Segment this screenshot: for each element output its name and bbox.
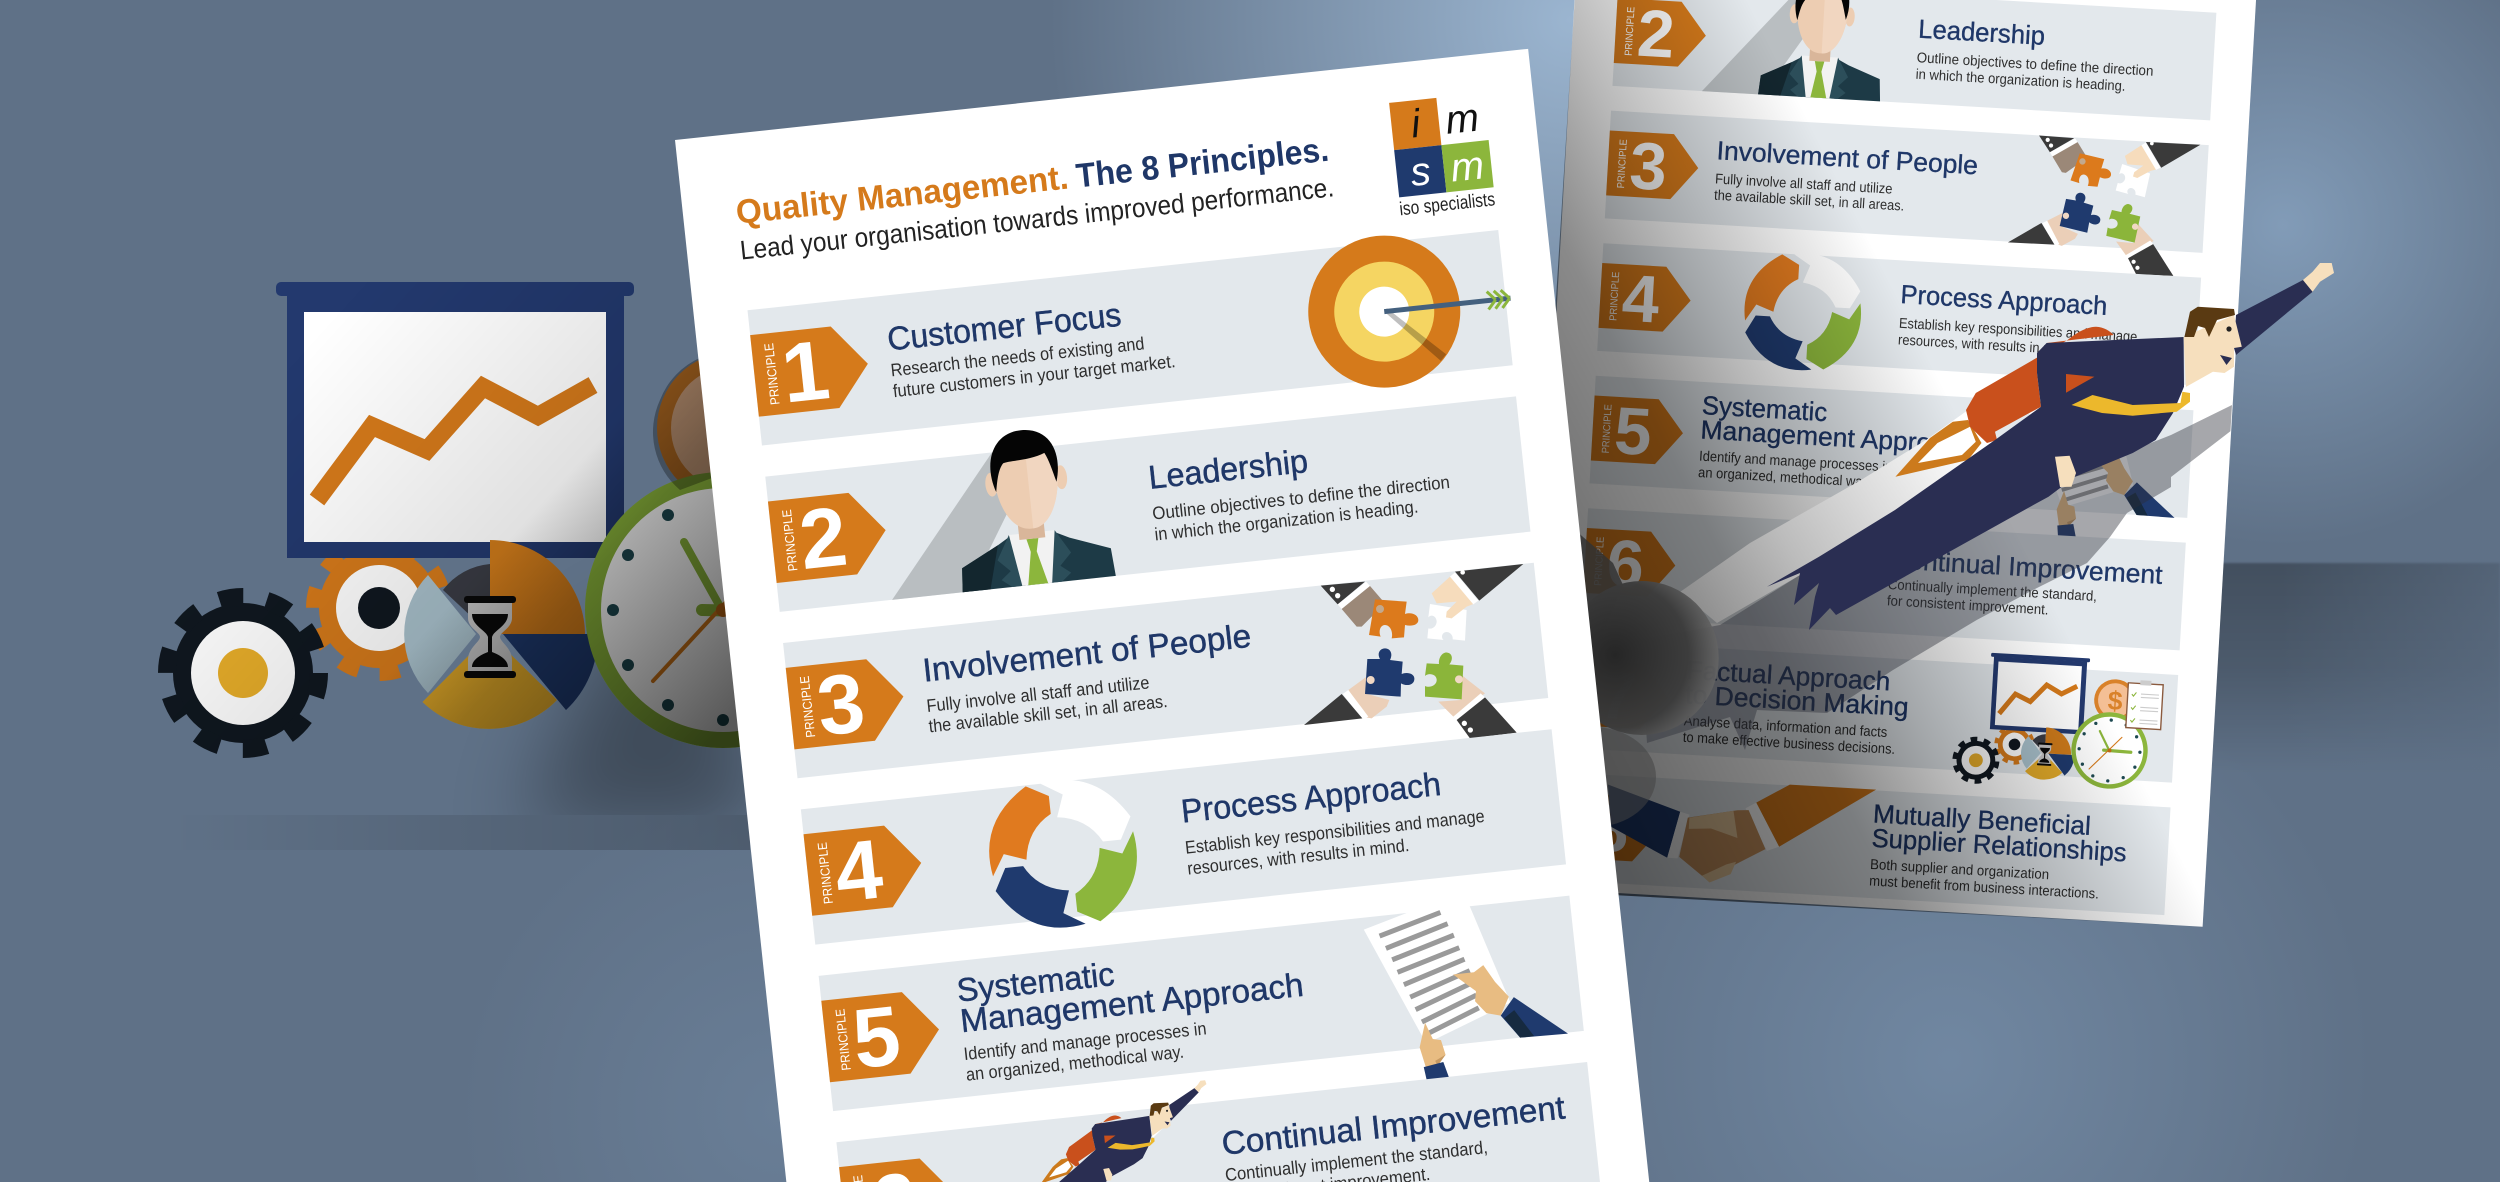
row 5: Systematic Management Approach <box>817 880 1588 1147</box>
principle 1 badge <box>750 318 873 424</box>
principle 5 badge: 5 <box>848 988 905 1086</box>
principle 1 badge: PRINCIPLE <box>761 342 783 406</box>
row 1: Customer Focus <box>747 223 1519 454</box>
back row 6: Continual Improvement: 6 <box>1605 527 1646 603</box>
back row 3: Involvement of People: PRINCIPLE <box>1616 139 1630 189</box>
back row 2: Leadership: Outline objectives to define the direction <box>1916 50 2154 80</box>
back row 8: Mutually Beneficial Supplier Relationships: Supplier Relationships <box>1871 823 2128 867</box>
row 6: Continual Improvement <box>834 1040 1602 1182</box>
back row 4: Process Approach: PRINCIPLE <box>1608 271 1622 321</box>
back row 6: Continual Improvement: Continual Improvement <box>1889 544 2164 590</box>
back row 3: Involvement of People: Involvement of People <box>1716 135 1979 180</box>
back row 7: Factual Approach to Decision Making: Analyse data, information and facts <box>1683 713 1888 741</box>
row 3: Involvement of People: Involvement of People <box>921 617 1253 689</box>
back row 7: Factual Approach to Decision Making: PRINCIPLE <box>1585 669 1599 718</box>
back row 4: Process Approach: resources, with results in mind. <box>1898 332 2075 359</box>
back row 7: Factual Approach to Decision Making: Factual Approach <box>1686 655 1891 696</box>
back row 6: Continual Improvement <box>1582 508 2186 650</box>
back row 8: Mutually Beneficial Supplier Relationships: Both supplier and organization <box>1870 857 2050 883</box>
back row 6: Continual Improvement: for consistent improvement. <box>1886 593 2049 619</box>
back sheet paper and rows <box>1523 0 2271 927</box>
row 4: Process Approach: Establish key responsibilities and manage <box>1184 806 1485 858</box>
back row 8: Mutually Beneficial Supplier Relationships: Mutually Beneficial <box>1872 798 2092 841</box>
principle 3 badge: PRINCIPLE <box>797 675 818 738</box>
logo: ism iso specialists: iso specialists <box>1398 189 1496 220</box>
icon: target with arrow <box>1301 223 1519 395</box>
row 3: Involvement of People <box>781 540 1552 815</box>
back sheet <box>1556 0 2256 927</box>
back row 5: Systematic Management Approach: 5 <box>1612 394 1654 470</box>
principle 3 badge: 3 <box>813 655 869 753</box>
icon: hands with puzzle pieces <box>1286 541 1542 761</box>
front sheet <box>675 49 1687 1182</box>
back row 7: Factual Approach to Decision Making <box>1574 629 2179 793</box>
back row 4: Process Approach: 4 <box>1620 262 1661 338</box>
row 4: Process Approach <box>801 728 1567 954</box>
row 2: Leadership: Outline objectives to define the direction <box>1151 472 1451 524</box>
back row 5: Systematic Management Approach: PRINCIPLE <box>1601 404 1615 454</box>
principle 3 badge <box>785 651 909 756</box>
row 3: Involvement of People: the available skill set, in all areas. <box>928 691 1168 736</box>
logo: ism iso specialists: m <box>1448 143 1486 191</box>
big flying businessman with rocket pack <box>1767 263 2334 630</box>
row 2: Leadership: in which the organization is heading. <box>1154 496 1419 545</box>
principle 5 badge: PRINCIPLE <box>832 1008 854 1071</box>
back row 5: Systematic Management Approach <box>1588 363 2194 546</box>
back row 5: Systematic Management Approach: Management Approach <box>1700 414 1975 460</box>
title: Quality Management. <box>734 159 1070 232</box>
row 2: Leadership: Leadership <box>1147 442 1310 496</box>
back row 6: Continual Improvement: Continually implement the standard, <box>1887 577 2097 605</box>
back row 6: Continual Improvement: PRINCIPLE <box>1593 536 1607 586</box>
row 5: Systematic Management Approach: Management Approach <box>958 966 1305 1039</box>
logo: ism iso specialists: s <box>1408 149 1433 195</box>
back row 8: Mutually Beneficial Supplier Relationships: must benefit from business interactions. <box>1869 873 2099 903</box>
back row 8: Mutually Beneficial Supplier Relationships: PRINCIPLE <box>1578 801 1592 851</box>
icon: small flying businessman <box>980 1080 1222 1182</box>
icon: document and pointing hand <box>1361 881 1572 1089</box>
logo: ism iso specialists: m <box>1443 96 1481 143</box>
principle 4 badge: PRINCIPLE <box>814 841 836 905</box>
back row 5: Systematic Management Approach: Systematic <box>1701 390 1828 427</box>
logo: ism iso specialists: i <box>1409 102 1423 147</box>
principle 4 badge: 4 <box>830 821 887 920</box>
title <box>734 131 1331 232</box>
icon: business person <box>876 422 1116 600</box>
row 3: Involvement of People: Fully involve all staff and utilize <box>926 672 1150 716</box>
row 2: Leadership <box>763 377 1530 612</box>
back row 2: Leadership: PRINCIPLE <box>1624 6 1637 56</box>
back row 3: Involvement of People <box>1603 92 2210 282</box>
row 4: Process Approach: resources, with results in mind. <box>1186 835 1410 879</box>
icon: process cycle arrows <box>982 773 1144 935</box>
row 4: Process Approach: Process Approach <box>1179 765 1443 830</box>
back row 5: Systematic Management Approach: Identify and manage processes in <box>1699 449 1893 476</box>
left icon group: chart board, gears, pie, clock <box>158 282 740 758</box>
front sheet paper <box>675 49 1687 1182</box>
back row 3: Involvement of People: the available skill set, in all areas. <box>1714 188 1905 215</box>
row 1: Customer Focus: Customer Focus <box>885 296 1123 357</box>
row 5: Systematic Management Approach: an organized, methodical way. <box>965 1042 1185 1085</box>
subtitle: Lead your organisation towards improved performance. <box>739 172 1335 266</box>
back row 8: Mutually Beneficial Supplier Relationships <box>1567 772 2171 915</box>
row 1: Customer Focus: Research the needs of existing and <box>890 333 1145 380</box>
back row 3: Involvement of People: 3 <box>1628 129 1669 205</box>
title: The 8 Principles. <box>1074 131 1331 195</box>
back row 2: Leadership: in which the organization is heading. <box>1915 67 2126 95</box>
back row 5: Systematic Management Approach: an organized, methodical way. <box>1698 465 1872 491</box>
principle 6 badge <box>839 1150 962 1182</box>
principle 2 badge <box>767 484 891 590</box>
principle 4 badge <box>803 817 926 923</box>
row 6: Continual Improvement: Continual Improvement <box>1220 1088 1567 1162</box>
principle 2 badge: PRINCIPLE <box>779 508 800 572</box>
back row 4: Process Approach: Establish key responsibilities and manage <box>1899 316 2138 345</box>
back row 3: Involvement of People: Fully involve all staff and utilize <box>1715 171 1893 198</box>
logo: ism iso specialists <box>1388 93 1496 220</box>
principle 5 badge <box>821 984 944 1089</box>
row 1: Customer Focus: future customers in your target market. <box>892 351 1176 401</box>
back row 7: Factual Approach to Decision Making: to make effective business decisions. <box>1682 730 1896 758</box>
back row 7: Factual Approach to Decision Making: to Decision Making <box>1685 679 1910 722</box>
back row 4: Process Approach <box>1597 242 2201 393</box>
row 5: Systematic Management Approach: Systematic <box>955 955 1116 1009</box>
back row 2: Leadership <box>1612 0 2217 120</box>
back row 8: Mutually Beneficial Supplier Relationships: 8 <box>1589 791 1631 867</box>
back sheet shading and flying man's shadow <box>1556 0 2232 926</box>
back row 7: Factual Approach to Decision Making: 7 <box>1597 659 1638 735</box>
row 5: Systematic Management Approach: Identify and manage processes in <box>963 1018 1207 1064</box>
principle 1 badge: 1 <box>777 322 834 421</box>
back row 2: Leadership: Leadership <box>1918 14 2046 51</box>
back row 4: Process Approach: Process Approach <box>1900 279 2108 321</box>
principle 2 badge: 2 <box>795 489 851 587</box>
